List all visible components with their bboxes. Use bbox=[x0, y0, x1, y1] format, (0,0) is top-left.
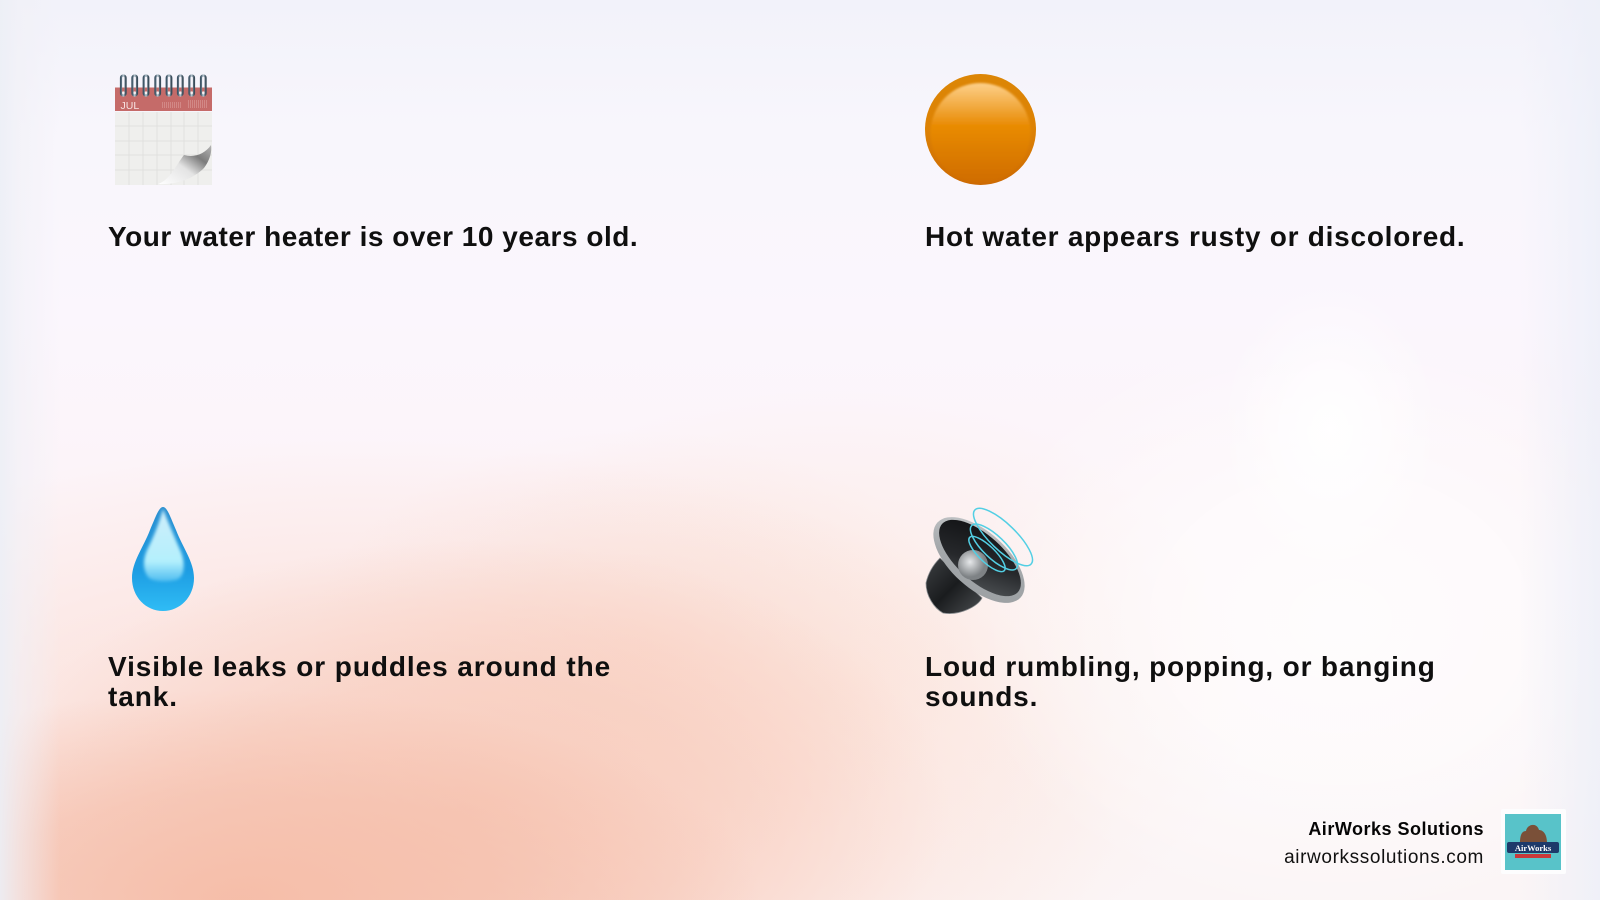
logo bbox=[1501, 809, 1566, 874]
icon: orange circle bbox=[925, 74, 1036, 185]
logo: AirWorks bbox=[1515, 843, 1552, 853]
heading: leaks: Visible leaks or puddles around the tank. bbox=[108, 651, 611, 712]
heading: age: Your water heater is over 10 years old. bbox=[108, 221, 638, 252]
website: airworkssolutions.com bbox=[1284, 847, 1484, 868]
heading: rusty: Hot water appears rusty or discolored. bbox=[925, 221, 1465, 252]
icon: calendar bbox=[115, 74, 212, 185]
panel: leaks bbox=[108, 507, 611, 712]
panel: age of heater bbox=[108, 74, 638, 252]
brand footer bbox=[1284, 809, 1566, 874]
panel: rusty water bbox=[925, 74, 1465, 252]
icon: speaker bbox=[926, 508, 1034, 614]
panel: noises bbox=[926, 508, 1034, 614]
magnet bbox=[926, 558, 982, 614]
icon: water drop bbox=[132, 507, 194, 611]
heading: noises: Loud rumbling, popping, or banging sounds. bbox=[925, 651, 1436, 712]
icon: calendar: JUL bbox=[120, 100, 139, 112]
brand name: AirWorks Solutions bbox=[1308, 819, 1484, 839]
